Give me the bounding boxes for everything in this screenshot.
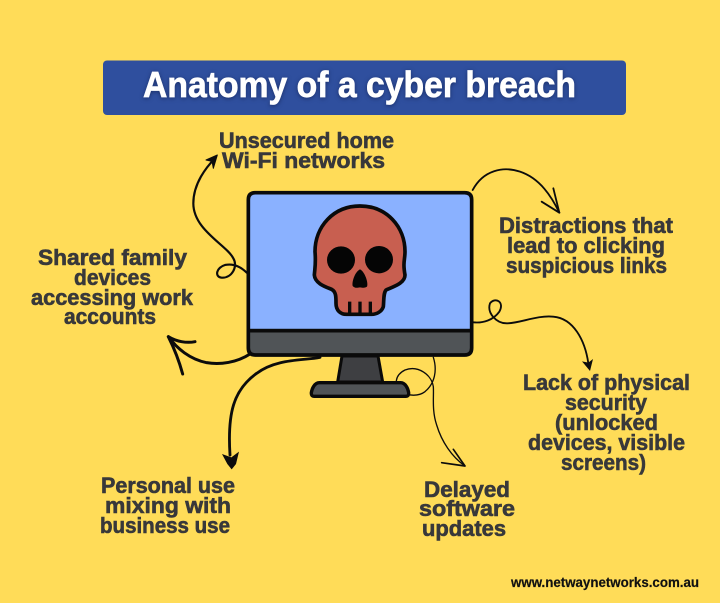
label: unsecured home Wi-Fi networks: Unsecured home <box>219 128 394 153</box>
label: shared family devices: accounts <box>64 304 156 329</box>
arrow: to delayed software updates <box>396 357 465 466</box>
monitor screen <box>248 193 472 331</box>
label: distractions: Distractions that <box>499 213 673 238</box>
arrow: to personal use mixing with business use <box>222 357 320 469</box>
label: delayed software updates: software <box>419 496 515 521</box>
icon: desktop monitor with skull <box>248 193 472 396</box>
label: shared family devices: Shared family <box>38 245 187 270</box>
monitor stand <box>338 356 383 382</box>
arrow: to shared family devices <box>168 337 250 374</box>
label: lack of physical security: devices, visible <box>528 430 685 455</box>
label: personal use: business use <box>100 513 230 538</box>
label: lack of physical security: screens) <box>561 450 646 475</box>
label: distractions <box>499 213 673 278</box>
label: lack of physical security: security <box>565 390 647 415</box>
title banner: Anatomy of a cyber breach <box>143 64 576 105</box>
title banner <box>103 60 626 115</box>
label: unsecured home Wi-Fi networks <box>219 128 394 173</box>
label: shared family devices: devices <box>74 265 151 290</box>
monitor base <box>311 383 409 396</box>
label: delayed software updates <box>419 477 515 541</box>
label: delayed software updates: updates <box>422 516 506 541</box>
label: personal use <box>100 473 235 538</box>
monitor bezel <box>248 331 472 355</box>
website footer: www.netwaynetworks.com.au <box>510 575 699 590</box>
arrow: to lack of physical security <box>473 300 593 371</box>
label: lack of physical security: Lack of physical <box>523 370 690 395</box>
label: lack of physical security <box>523 370 690 475</box>
label: delayed software updates: Delayed <box>424 477 510 502</box>
label: shared family devices <box>31 245 193 329</box>
arrow: to distractions that lead to clicking suspicious links <box>473 169 559 213</box>
label: distractions: lead to clicking <box>507 233 665 258</box>
icon: skull <box>314 206 405 314</box>
label: lack of physical security: (unlocked <box>555 410 658 435</box>
label: distractions: suspicious links <box>506 253 667 278</box>
label: personal use: Personal use <box>101 473 235 498</box>
label: shared family devices: accessing work <box>31 285 193 310</box>
label: unsecured home Wi-Fi networks: Wi-Fi networks <box>222 148 385 173</box>
label: personal use: mixing with <box>105 493 231 518</box>
arrow: to unsecured home Wi-Fi networks <box>193 155 247 278</box>
